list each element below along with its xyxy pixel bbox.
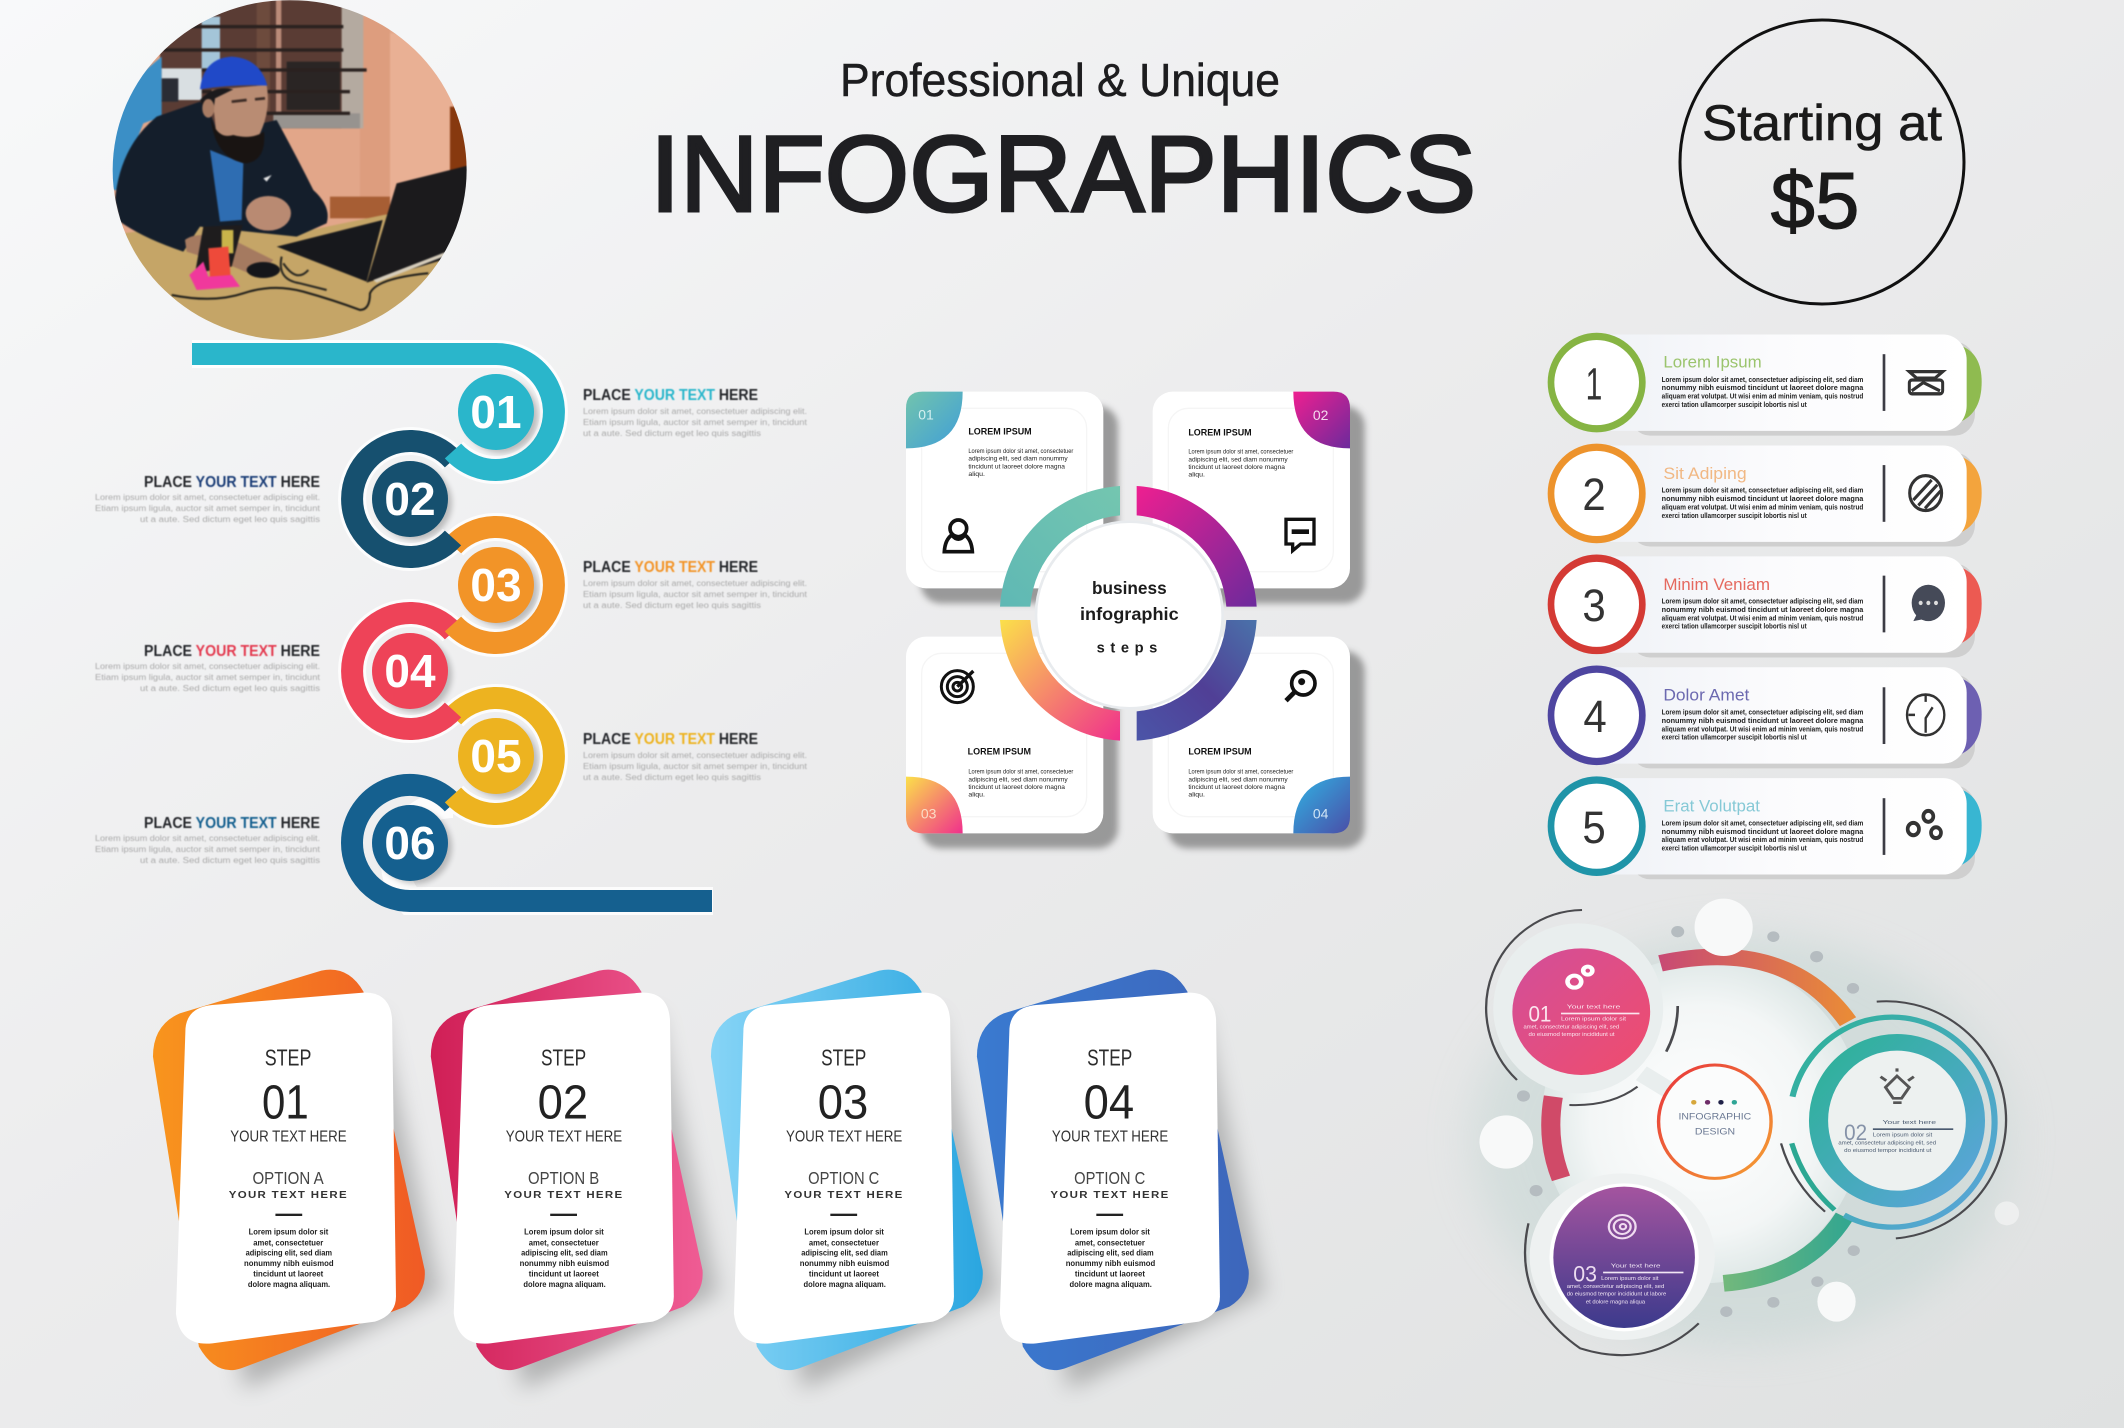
circle 03: et dolore magna aliqua (1586, 1300, 1645, 1305)
label 03: Etiam ipsum ligula, auctor sit amet semper in, tincidunt (583, 590, 808, 599)
row 4: Dolor Amet (1663, 686, 1750, 705)
row 5: 5 (1582, 802, 1606, 853)
label 02: Etiam ipsum ligula, auctor sit amet semper in, tincidunt (95, 504, 321, 513)
step card 01: STEP (265, 1046, 311, 1071)
card 04: Lorem ipsum dolor sit amet, consectetuer (1188, 769, 1294, 776)
circle 01: 01 (1528, 1003, 1551, 1027)
card 03: Lorem ipsum dolor sit amet, consectetuer (968, 769, 1074, 776)
label 04: ut a aute. Sed dictum eget leo quis sagittis (140, 684, 320, 693)
card 01: adipiscing elit, sed diam nonummy (968, 456, 1068, 463)
step card 01: Lorem ipsum dolor sit (249, 1227, 328, 1236)
label 02: Lorem ipsum dolor sit amet, consectetuer adipiscing elit. (95, 493, 320, 502)
centre circle: DESIGN (1695, 1127, 1735, 1137)
row 5: exerci tation ullamcorper suscipit lobortis nisl ut (1662, 843, 1807, 853)
step card 03: amet, consectetuer (809, 1238, 879, 1247)
step card 04: Lorem ipsum dolor sit (1070, 1227, 1150, 1236)
decorative dots (1517, 926, 1860, 1317)
circle 03: Lorem ipsum dolor sit (1601, 1276, 1659, 1282)
row 4: 4 (1583, 691, 1607, 742)
step card 03: STEP (821, 1046, 866, 1071)
icon: chat bubble (1286, 519, 1314, 551)
title (650, 54, 1476, 234)
centre circle text: infographic (1080, 604, 1179, 624)
circle 01 (1486, 910, 1678, 1105)
ring 04 (352, 613, 453, 729)
card 01: Lorem ipsum dolor sit amet, consectetuer (968, 448, 1074, 455)
step card 01: tincidunt ut laoreet (253, 1269, 323, 1279)
badge 06 (372, 805, 448, 881)
card 01: tincidunt ut laoreet dolore magna (968, 463, 1065, 470)
circle 01: amet, consectetur adipiscing elit, sed (1523, 1025, 1619, 1030)
circle 02: do eiusmod tempor incididunt ut (1844, 1148, 1932, 1154)
soft background glow (1473, 933, 2009, 1347)
icon: target (941, 671, 973, 703)
card 01: 01 (918, 406, 934, 422)
row 3 (1551, 556, 1982, 657)
step card 04: amet, consectetuer (1075, 1238, 1145, 1247)
card 04: LOREM IPSUM (1188, 747, 1252, 757)
step card 04: dolore magna aliquam. (1070, 1280, 1152, 1289)
centre circle text (1036, 522, 1223, 708)
label 04: Lorem ipsum dolor sit amet, consectetuer adipiscing elit. (95, 662, 320, 671)
row 3: Minim Veniam (1663, 575, 1770, 594)
step card 01: dolore magna aliquam. (248, 1280, 330, 1289)
step card 02: 02 (538, 1076, 588, 1129)
step card 04: tincidunt ut laoreet (1075, 1269, 1145, 1279)
row 3: exerci tation ullamcorper suscipit lobortis nisl ut (1662, 621, 1807, 631)
step card 03: YOUR TEXT HERE (784, 1190, 902, 1201)
icon: envelope (1909, 372, 1943, 394)
step card 03: dolore magna aliquam. (804, 1280, 886, 1289)
price badge (1680, 20, 1964, 304)
label 01: Etiam ipsum ligula, auctor sit amet semper in, tincidunt (583, 418, 808, 427)
icon: speech dots (1912, 585, 1945, 621)
step card 02: OPTION B (528, 1168, 599, 1188)
badge 05: 05 (470, 730, 522, 782)
circle 01: do eiusmod tempor incididunt ut (1528, 1032, 1615, 1038)
step card 03: adipiscing elit, sed diam (801, 1248, 888, 1257)
circle 01: Lorem ipsum dolor sit (1561, 1017, 1627, 1023)
label 03: PLACE YOUR TEXT HERE (583, 559, 758, 576)
panel: numbered list rows (1551, 335, 1982, 879)
label 06: Lorem ipsum dolor sit amet, consectetuer adipiscing elit. (95, 834, 320, 843)
centre circle (1659, 1065, 1771, 1178)
row 2: exerci tation ullamcorper suscipit lobortis nisl ut (1662, 511, 1807, 520)
icon: person (944, 520, 972, 552)
step card 03: tincidunt ut laoreet (809, 1269, 879, 1279)
step card 01: 01 (262, 1076, 309, 1129)
label 03 (583, 559, 808, 610)
step card 02: dolore magna aliquam. (523, 1280, 606, 1289)
label 05: PLACE YOUR TEXT HERE (583, 731, 758, 748)
step card 03: Lorem ipsum dolor sit (804, 1227, 884, 1236)
row 4 (1551, 667, 1982, 768)
label 02 (95, 474, 321, 524)
step card 02: Lorem ipsum dolor sit (524, 1227, 604, 1236)
step card 01: OPTION A (252, 1168, 324, 1188)
step card 02: amet, consectetuer (529, 1238, 599, 1247)
card shadows (187, 1013, 1264, 1390)
circle 02: Your text here (1882, 1120, 1936, 1126)
step card 01: YOUR TEXT HERE (229, 1190, 347, 1201)
white balls (1479, 899, 2019, 1322)
label 01: ut a aute. Sed dictum eget leo quis sagittis (583, 429, 761, 438)
timeline labels (95, 387, 808, 865)
badge 01: 01 (470, 386, 522, 438)
panel: four step cards (153, 970, 1264, 1390)
row 2: nonummy nibh euismod tincidunt ut laoreet dolore magna (1662, 494, 1864, 503)
card 02: LOREM IPSUM (1188, 427, 1252, 437)
step card 02 (431, 970, 703, 1370)
label 02: PLACE YOUR TEXT HERE (144, 474, 320, 491)
badge 02: 02 (384, 473, 436, 525)
step card 04: adipiscing elit, sed diam (1067, 1248, 1154, 1257)
icon: clock (1907, 695, 1944, 735)
row 5 (1551, 778, 1982, 879)
card 04: 04 (1313, 806, 1329, 822)
panel: four cards with centre ring (906, 392, 1365, 848)
icon: globe (1910, 476, 1942, 511)
label 01 (583, 387, 808, 438)
main heading: INFOGRAPHICS (650, 113, 1476, 234)
label 01: Lorem ipsum dolor sit amet, consectetuer adipiscing elit. (583, 407, 807, 416)
photo: man working at a laptop (100, 0, 480, 347)
badge 05 (458, 718, 534, 794)
row 4: Lorem ipsum dolor sit amet, consectetuer adipiscing elit, sed diam (1662, 707, 1864, 717)
card 01: aliqu. (968, 471, 985, 478)
step card 02: nonummy nibh euismod (520, 1259, 609, 1268)
ring 02 (352, 441, 453, 557)
row 3: nonummy nibh euismod tincidunt ut laoreet dolore magna (1662, 605, 1864, 614)
card 02: Lorem ipsum dolor sit amet, consectetuer (1188, 449, 1294, 456)
step card 04: OPTION C (1074, 1168, 1145, 1188)
card 01 (906, 392, 1103, 588)
label 06: ut a aute. Sed dictum eget leo quis sagittis (140, 856, 320, 865)
row 5: aliquam erat volutpat. Ut wisi enim ad minim veniam, quis nostrud (1662, 835, 1863, 844)
label 05 (583, 731, 808, 782)
label 04 (95, 643, 321, 693)
circle 03: 03 (1573, 1263, 1597, 1287)
badge 03: 03 (470, 559, 522, 611)
centre circle: INFOGRAPHIC (1678, 1112, 1751, 1122)
ring 05 (453, 698, 554, 814)
circle 03 (1525, 1173, 1715, 1355)
badge 06: 06 (384, 817, 436, 869)
step card 01: amet, consectetuer (253, 1238, 324, 1247)
label 05: Lorem ipsum dolor sit amet, consectetuer adipiscing elit. (583, 751, 807, 760)
step card 04: 04 (1084, 1076, 1134, 1129)
icon: gears (1908, 811, 1941, 838)
row 1: Lorem Ipsum (1663, 353, 1762, 371)
card 03: tincidunt ut laoreet dolore magna (968, 784, 1065, 791)
centre circle text: steps (1097, 641, 1157, 657)
card 02: 02 (1313, 407, 1329, 423)
step card 03: nonummy nibh euismod (800, 1259, 889, 1268)
subtitle: Professional & Unique (840, 54, 1280, 106)
circle 03: do eiusmod tempor incididunt ut labore (1567, 1292, 1666, 1298)
label 05: Etiam ipsum ligula, auctor sit amet semper in, tincidunt (583, 762, 808, 771)
step card 01: adipiscing elit, sed diam (246, 1248, 332, 1257)
card 02: aliqu. (1188, 472, 1205, 479)
row 5: Lorem ipsum dolor sit amet, consectetuer adipiscing elit, sed diam (1662, 818, 1864, 828)
label 04: Etiam ipsum ligula, auctor sit amet semper in, tincidunt (95, 673, 321, 682)
label 01: PLACE YOUR TEXT HERE (583, 387, 758, 404)
label 04: PLACE YOUR TEXT HERE (144, 643, 320, 660)
label 06: PLACE YOUR TEXT HERE (144, 815, 320, 832)
row 4: exerci tation ullamcorper suscipit lobortis nisl ut (1662, 732, 1807, 742)
circle 01: Your text here (1567, 1005, 1620, 1010)
card 04: aliqu. (1188, 792, 1205, 799)
circle 02: Lorem ipsum dolor sit (1873, 1133, 1933, 1139)
card 03: aliqu. (968, 792, 985, 799)
label 05: ut a aute. Sed dictum eget leo quis sagittis (583, 773, 761, 782)
panel: three circle process diagram (1473, 899, 2019, 1355)
connector arcs (1551, 957, 1848, 1283)
row 4: aliquam erat volutpat. Ut wisi enim ad minim veniam, quis nostrud (1662, 724, 1863, 733)
circle 02: 02 (1844, 1121, 1867, 1146)
icon: magnifier (1286, 672, 1315, 701)
step card 02: STEP (541, 1046, 586, 1071)
badge 03 (458, 547, 534, 623)
label 06 (95, 815, 321, 865)
row 5: nonummy nibh euismod tincidunt ut laoreet dolore magna (1662, 827, 1864, 836)
row 4: nonummy nibh euismod tincidunt ut laoreet dolore magna (1662, 716, 1864, 725)
card 04 (1153, 637, 1350, 833)
card 03: LOREM IPSUM (968, 747, 1031, 757)
row 1: 1 (1586, 359, 1602, 410)
step card 04: YOUR TEXT HERE (1050, 1190, 1168, 1201)
circle 02 (1781, 1001, 2006, 1238)
row 5: Erat Volutpat (1663, 797, 1761, 816)
row 2 (1551, 445, 1982, 547)
row 3: aliquam erat volutpat. Ut wisi enim ad minim veniam, quis nostrud (1662, 613, 1863, 622)
step card 04 (977, 970, 1249, 1370)
label 06: Etiam ipsum ligula, auctor sit amet semper in, tincidunt (95, 845, 321, 854)
label 03: ut a aute. Sed dictum eget leo quis sagittis (583, 601, 761, 610)
label 02: ut a aute. Sed dictum eget leo quis sagittis (140, 515, 320, 524)
card 03: 03 (921, 806, 937, 822)
step card 02: YOUR TEXT HERE (506, 1127, 622, 1145)
price badge: Starting at (1702, 95, 1942, 151)
row 3: Lorem ipsum dolor sit amet, consectetuer adipiscing elit, sed diam (1662, 596, 1864, 606)
step card 03: YOUR TEXT HERE (786, 1127, 902, 1145)
circle 03: amet, consectetur adipiscing elit, sed (1567, 1284, 1664, 1290)
row 1 (1551, 335, 1982, 436)
row 2: Sit Adiping (1663, 464, 1747, 483)
row 1: aliquam erat volutpat. Ut wisi enim ad minim veniam, quis nostrud (1662, 391, 1863, 401)
row 1: Lorem ipsum dolor sit amet, consectetuer adipiscing elit, sed diam (1662, 375, 1864, 384)
card 02 (1153, 392, 1350, 588)
step card 03: 03 (818, 1076, 868, 1129)
ring 06 (352, 785, 712, 901)
centre ring segments (1000, 486, 1257, 741)
row 2: Lorem ipsum dolor sit amet, consectetuer adipiscing elit, sed diam (1662, 485, 1864, 495)
badge 04 (372, 633, 448, 709)
row 2: 2 (1582, 470, 1606, 521)
card 02: adipiscing elit, sed diam nonummy (1188, 456, 1288, 463)
row 1: nonummy nibh euismod tincidunt ut laoreet dolore magna (1662, 383, 1864, 392)
step card 03: OPTION C (808, 1168, 879, 1188)
step card 02: tincidunt ut laoreet (529, 1269, 599, 1279)
card 01: LOREM IPSUM (968, 426, 1032, 436)
card 03 (906, 637, 1103, 833)
step card 01 (153, 970, 425, 1370)
card 04: tincidunt ut laoreet dolore magna (1188, 784, 1285, 791)
step card 01: nonummy nibh euismod (244, 1259, 334, 1268)
step card 01: YOUR TEXT HERE (230, 1127, 347, 1145)
step card 03 (711, 970, 983, 1370)
ring 03 (453, 527, 554, 643)
price badge: $5 (1771, 156, 1859, 245)
badge 04: 04 (384, 645, 436, 697)
row 1: exerci tation ullamcorper suscipit lobortis nisl ut (1662, 400, 1807, 409)
badge 01 (458, 374, 534, 450)
step card 02: YOUR TEXT HERE (504, 1190, 622, 1201)
step card 04: YOUR TEXT HERE (1052, 1127, 1168, 1145)
row 2: aliquam erat volutpat. Ut wisi enim ad minim veniam, quis nostrud (1662, 502, 1863, 512)
circle 02: amet, consectetur adipiscing elit, sed (1838, 1141, 1936, 1146)
card shadows (921, 406, 1365, 848)
row 3: 3 (1582, 580, 1606, 632)
connector to centre (1641, 1073, 1680, 1097)
card 02: tincidunt ut laoreet dolore magna (1188, 464, 1285, 471)
step card 04: nonummy nibh euismod (1066, 1259, 1155, 1268)
badge 02 (372, 461, 448, 537)
step card 04: STEP (1087, 1046, 1132, 1071)
label 03: Lorem ipsum dolor sit amet, consectetuer adipiscing elit. (583, 579, 807, 588)
step card 02: adipiscing elit, sed diam (521, 1248, 608, 1257)
ring 01 with top bar (192, 354, 554, 470)
serpentine timeline 01-06 (192, 354, 713, 901)
centre circle text: business (1092, 578, 1167, 598)
card 04: adipiscing elit, sed diam nonummy (1188, 776, 1288, 783)
circle 03: Your text here (1611, 1264, 1660, 1269)
card 03: adipiscing elit, sed diam nonummy (968, 776, 1068, 783)
